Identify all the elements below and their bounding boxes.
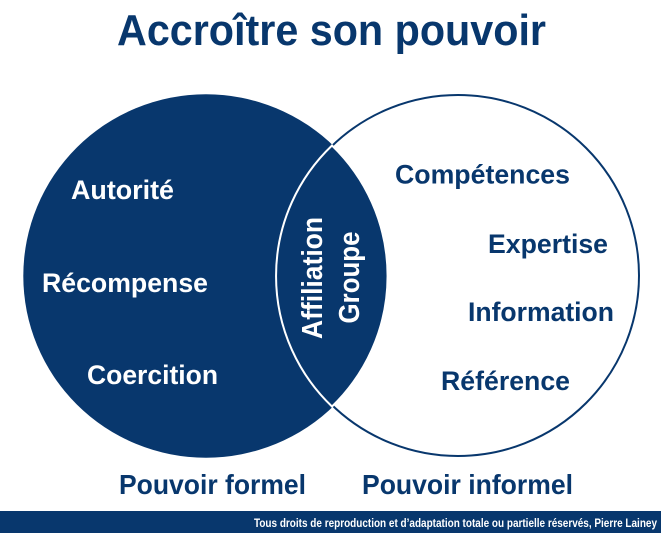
title: Accroître son pouvoir <box>117 6 546 55</box>
footer band <box>0 511 661 533</box>
label: Groupe: Groupe <box>334 232 366 324</box>
caption: Pouvoir formel: Pouvoir formel <box>119 469 306 500</box>
label: Récompense: Récompense <box>42 268 208 298</box>
label: Compétences: Compétences <box>395 160 570 190</box>
intersection <box>276 146 388 406</box>
circle: pouvoir informel <box>277 95 639 456</box>
circle: pouvoir formel <box>23 94 389 458</box>
venn diagram <box>23 94 639 458</box>
label: Autorité: Autorité <box>71 175 174 205</box>
label: Coercition: Coercition <box>87 360 218 390</box>
label: Affiliation: Affiliation <box>297 217 329 339</box>
label: Référence: Référence <box>441 366 570 396</box>
label: Information: Information <box>468 297 614 327</box>
caption: Pouvoir informel: Pouvoir informel <box>362 469 573 500</box>
label: Expertise: Expertise <box>488 229 608 259</box>
